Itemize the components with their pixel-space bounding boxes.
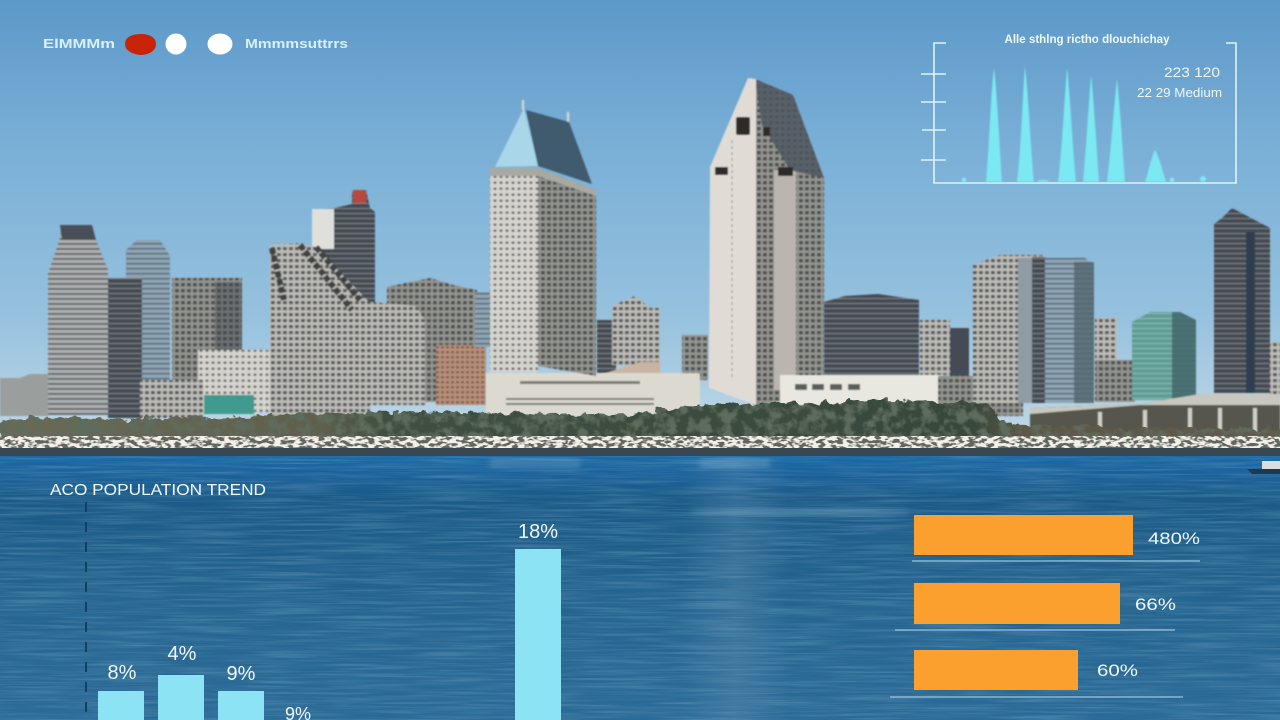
tower: glass grey strip <box>1018 258 1032 403</box>
axis <box>85 502 87 720</box>
skyline: hotel tower two <box>709 78 824 405</box>
tower: tall dark <box>1214 208 1270 393</box>
orange bar 3 <box>914 650 1078 690</box>
legend dot white small <box>166 34 186 54</box>
podium windows <box>506 381 654 405</box>
waterfront roofline <box>1030 394 1280 414</box>
boat <box>1247 461 1280 474</box>
dark face <box>753 79 824 405</box>
guide lines <box>890 561 1200 697</box>
pale face dotted seam <box>731 140 733 380</box>
legend label right: Mmmmsuttrrs <box>245 36 348 51</box>
tower: stepped front <box>360 302 425 405</box>
distant low town <box>0 374 48 416</box>
tower: orange <box>436 345 486 405</box>
water background <box>0 456 1280 720</box>
orange bar 3 label: 60% <box>1097 661 1138 680</box>
bar 1 label: 8% <box>108 662 137 684</box>
upper shadow <box>755 79 824 178</box>
tower: glass right <box>1045 258 1094 403</box>
pink block <box>600 362 660 382</box>
recessed pale strip <box>774 170 796 390</box>
cornice <box>490 168 596 196</box>
spires <box>523 100 568 122</box>
orange bar 2 <box>914 583 1120 624</box>
chart value one: 223 120 <box>1164 64 1220 80</box>
podium <box>486 373 700 416</box>
bar 2 <box>158 675 204 720</box>
terrace shadow <box>272 245 360 310</box>
skyline: mid background towers <box>597 296 708 382</box>
skyline: hotel tower one <box>486 100 700 416</box>
tower: dark slim <box>950 328 969 376</box>
chart frame <box>934 43 1236 183</box>
sky background <box>0 0 1280 458</box>
bar chart title: ACO POPULATION TREND <box>50 482 266 499</box>
bar 3 <box>218 691 264 720</box>
right face <box>538 168 596 376</box>
tower: short <box>1095 360 1135 402</box>
tower: cream <box>612 296 660 365</box>
dark openings <box>715 117 793 176</box>
low block <box>198 350 282 412</box>
white terminal <box>780 375 940 405</box>
tower: tall dark centre <box>1246 232 1255 393</box>
waterfront columns <box>1100 408 1255 432</box>
tower: glass right shade <box>1074 262 1094 403</box>
legend dot white large <box>208 34 232 54</box>
bar 3 label: 9% <box>227 663 256 685</box>
legend dot red <box>125 34 156 55</box>
bar 5 label: 18% <box>518 521 558 543</box>
edge block <box>1270 342 1280 394</box>
legend label left: ElMMMm <box>43 36 115 51</box>
roof dark <box>526 110 592 184</box>
tower: rear blue <box>126 240 170 385</box>
tower: glass left <box>973 255 1045 403</box>
tower: thin <box>1095 318 1117 363</box>
bar 1 <box>98 691 144 720</box>
low block front <box>140 380 203 418</box>
chart: orange horizontal bars <box>890 515 1200 697</box>
tree band <box>0 400 1280 446</box>
terminal annex <box>938 376 1023 416</box>
tower: slim dark <box>597 320 616 375</box>
sea wall <box>0 448 1280 456</box>
orange bar 2 label: 66% <box>1135 595 1176 614</box>
tower: dark mid <box>108 278 142 418</box>
terminal windows <box>795 384 860 390</box>
tower: left round top shade <box>60 225 96 240</box>
chart: population bars <box>50 482 561 720</box>
orange bar 1 label: 480% <box>1148 529 1200 548</box>
skyline: right cluster <box>780 208 1280 440</box>
tower: dark wide <box>824 294 919 375</box>
bar 2 label: 4% <box>168 643 197 665</box>
tower: teal round <box>1132 312 1196 400</box>
tower: small <box>682 335 708 380</box>
tower: glass dark side <box>1032 257 1045 403</box>
red crown <box>353 190 366 203</box>
tower: tan <box>920 320 950 375</box>
teal roof <box>204 395 254 414</box>
tower: stepped right <box>387 278 477 402</box>
chart spikes <box>962 66 1206 182</box>
tower: far narrow <box>475 292 491 347</box>
tower: left round <box>48 225 108 415</box>
chart ticks <box>921 74 946 160</box>
chart value two: 22 29 Medium <box>1137 85 1222 100</box>
tower: rear tan shade <box>215 282 242 382</box>
tower: terraced <box>270 243 370 417</box>
orange bar 1 <box>914 515 1133 555</box>
chart: spike line chart <box>921 32 1236 183</box>
bar 5 <box>515 549 561 720</box>
tower: red-top <box>312 190 375 310</box>
left face <box>490 168 538 372</box>
tower: rear tan block <box>172 278 242 382</box>
roof light <box>495 108 538 167</box>
tower: teal shade <box>1172 312 1196 400</box>
top-left legend <box>43 34 348 55</box>
shoreline trees and rocks <box>0 400 1280 456</box>
rock band <box>0 436 1280 448</box>
chart title: Alle sthlng rictho dlouchichay <box>1004 32 1170 46</box>
pale face <box>709 78 756 405</box>
skyline: left cluster <box>0 190 491 418</box>
tower: red-top light side <box>312 209 334 249</box>
waterfront complex <box>1030 394 1280 440</box>
